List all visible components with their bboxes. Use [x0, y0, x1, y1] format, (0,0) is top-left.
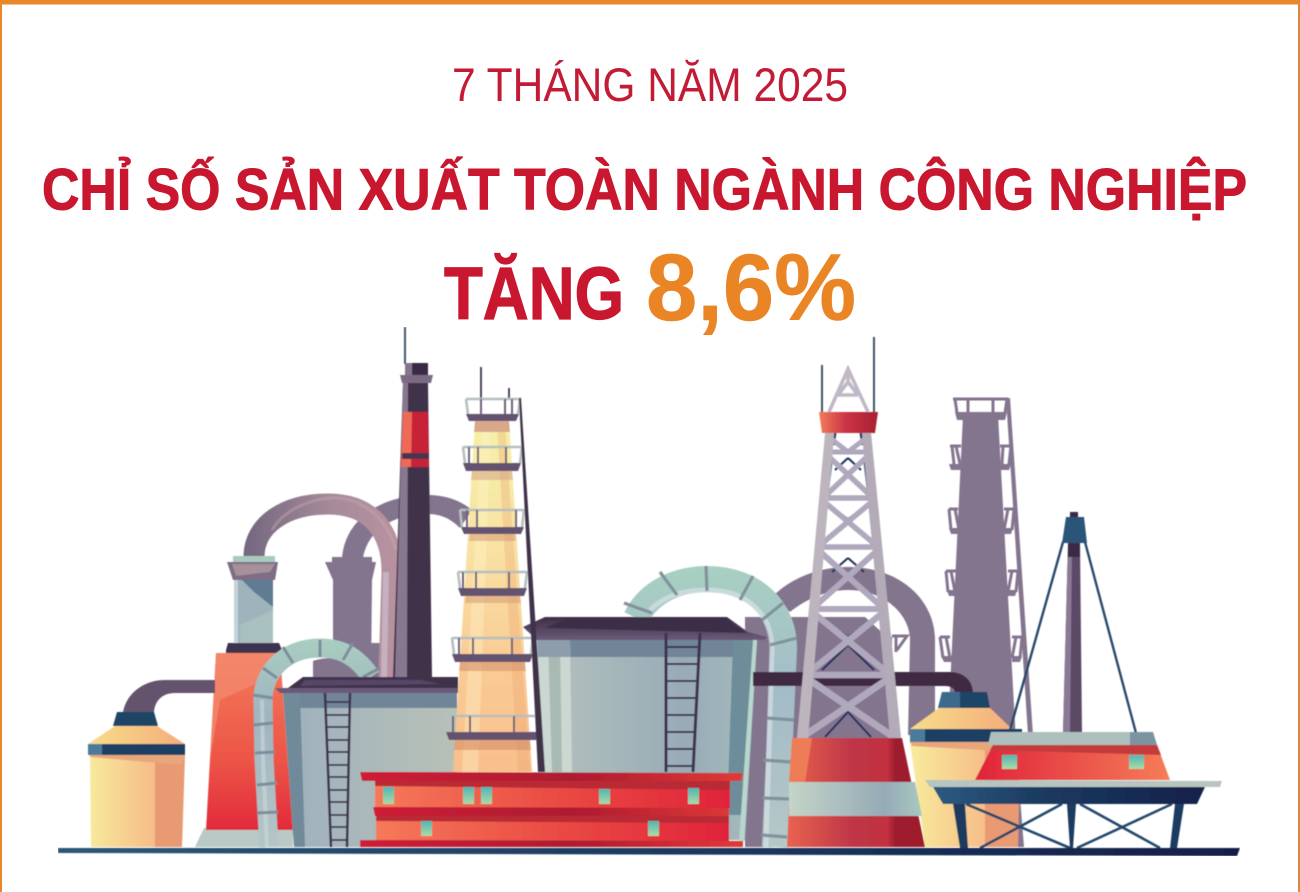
dark pipe left [123, 680, 215, 712]
derrick red collar [819, 412, 878, 433]
grey chimney with flange [227, 556, 278, 643]
nozzle left [113, 712, 158, 726]
background silhouette: right chimney [940, 398, 1033, 847]
derrick red base [787, 738, 925, 847]
tower ladder pole [519, 398, 545, 772]
tower balcony 2 [463, 447, 522, 471]
yellow tank right [910, 692, 1022, 847]
orange building [195, 643, 293, 847]
central tank [523, 617, 767, 842]
derrick tower [797, 337, 901, 738]
tower balcony 3 [460, 510, 524, 534]
tower balcony 4 [458, 572, 527, 596]
background silhouette: arch pipe and building behind derrick [745, 567, 935, 847]
offshore platform [925, 732, 1222, 848]
dark horizontal pipe behind derrick [753, 672, 973, 693]
derrick antennas [822, 337, 874, 412]
background silhouette: left arch and chimney [313, 495, 472, 680]
ground line [58, 848, 1240, 856]
dark chimney [393, 327, 433, 677]
mauve arc pipe [254, 498, 396, 678]
teal arc pipe left [253, 640, 380, 847]
illustration: industrial plant [58, 327, 1240, 856]
left tank ladder [325, 693, 350, 847]
central tank ladder [666, 633, 700, 772]
tower balcony 6 [446, 716, 540, 740]
left tank [275, 677, 458, 847]
headline value: 8,6%: 8,6% [646, 235, 856, 341]
yellow tank left [88, 726, 185, 847]
red central building [360, 772, 743, 847]
platform mast [1010, 512, 1136, 733]
headline: increase label: TĂNG [444, 252, 624, 335]
teal arc pipe right [624, 566, 797, 847]
tower balcony 5 [452, 638, 533, 662]
derrick top pyramid [829, 369, 868, 412]
tower antennas [481, 367, 509, 398]
subtitle: period: 7 THÁNG NĂM 2025 [452, 58, 848, 111]
tower balcony 1 [466, 399, 520, 421]
yellow and peach tower [453, 421, 532, 772]
